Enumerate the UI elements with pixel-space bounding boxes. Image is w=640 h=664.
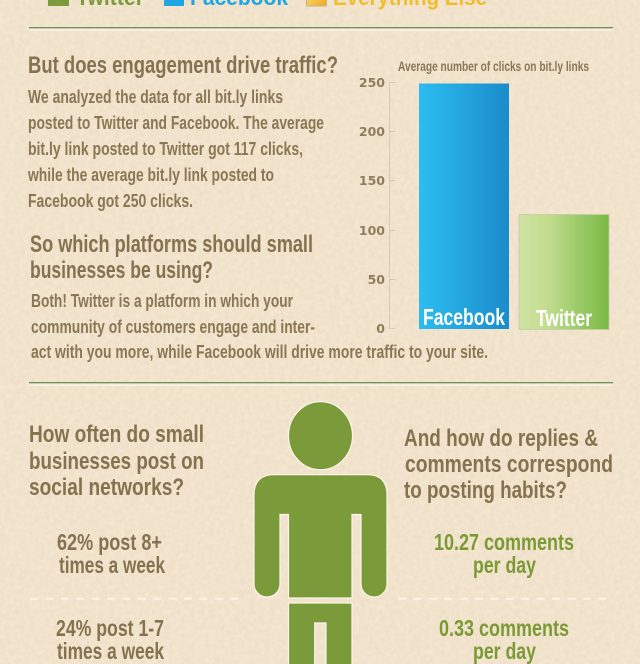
stat: 62%: 62% post 8+ xyxy=(57,529,162,555)
text block: analysis: We analyzed the data for all bit.ly links xyxy=(28,87,283,107)
heading: how often: businesses post on xyxy=(29,448,204,475)
bar: facebook xyxy=(419,84,509,330)
heading: how often: social networks? xyxy=(29,474,184,501)
text block: both: act with you more, while Facebook will drive more traffic to your site. xyxy=(31,342,488,362)
y axis: 0 xyxy=(376,321,385,336)
bar: twitter xyxy=(519,214,609,331)
legend xyxy=(48,0,487,10)
heading: platforms: So which platforms should small xyxy=(30,231,313,258)
y axis xyxy=(359,75,396,336)
legend: twitter xyxy=(48,0,144,10)
text block: analysis: while the average bit.ly link posted to xyxy=(27,165,274,185)
y axis: 50 xyxy=(368,272,385,287)
heading: how often: How often do small xyxy=(29,421,204,448)
panel: posting frequency xyxy=(29,421,204,664)
heading: engagement: But does engagement drive traffic? xyxy=(28,52,338,79)
heading: how often xyxy=(29,421,204,501)
panel: does engagement drive traffic xyxy=(27,52,338,211)
stat: 0.33 comments: per day xyxy=(473,638,536,664)
text block: analysis xyxy=(27,87,324,211)
text block: both: community of customers engage and inter- xyxy=(31,317,315,337)
bar: twitter: Twitter xyxy=(536,305,592,331)
bar: facebook: Facebook xyxy=(423,304,505,330)
text block: both xyxy=(31,291,488,362)
heading: platforms xyxy=(30,231,313,284)
text block: both: Both! Twitter is a platform in which your xyxy=(31,291,293,311)
stat: 10.27 comments: per day xyxy=(473,552,536,578)
heading: replies: to posting habits? xyxy=(404,477,567,504)
y axis: 250 xyxy=(359,75,385,90)
stat: 24%: 24% post 1-7 xyxy=(56,615,164,641)
y axis: 100 xyxy=(359,223,385,238)
y axis: 150 xyxy=(359,173,385,188)
stat: 10.27 comments xyxy=(434,529,574,578)
stat: 24%: times a week xyxy=(57,638,164,664)
stat: 0.33 comments: 0.33 comments xyxy=(439,615,569,641)
stat: 62% xyxy=(57,529,165,578)
y axis: 200 xyxy=(359,124,385,139)
heading: platforms: businesses be using? xyxy=(30,257,213,284)
text block: analysis: Facebook got 250 clicks. xyxy=(28,191,193,211)
icon: person figure xyxy=(254,402,387,664)
stat: 62%: times a week xyxy=(59,552,165,578)
text block: analysis: posted to Twitter and Facebook. The average xyxy=(28,113,324,133)
stat: 10.27 comments: 10.27 comments xyxy=(434,529,574,555)
text block: analysis: bit.ly link posted to Twitter got 117 clicks, xyxy=(28,139,303,159)
panel: replies and comments xyxy=(404,425,613,664)
heading: replies xyxy=(404,425,613,504)
stat: 24% xyxy=(56,615,164,664)
panel: which platforms xyxy=(30,231,488,362)
bar chart: clicks on bit.ly links xyxy=(359,58,609,336)
stat: 0.33 comments xyxy=(439,615,569,664)
